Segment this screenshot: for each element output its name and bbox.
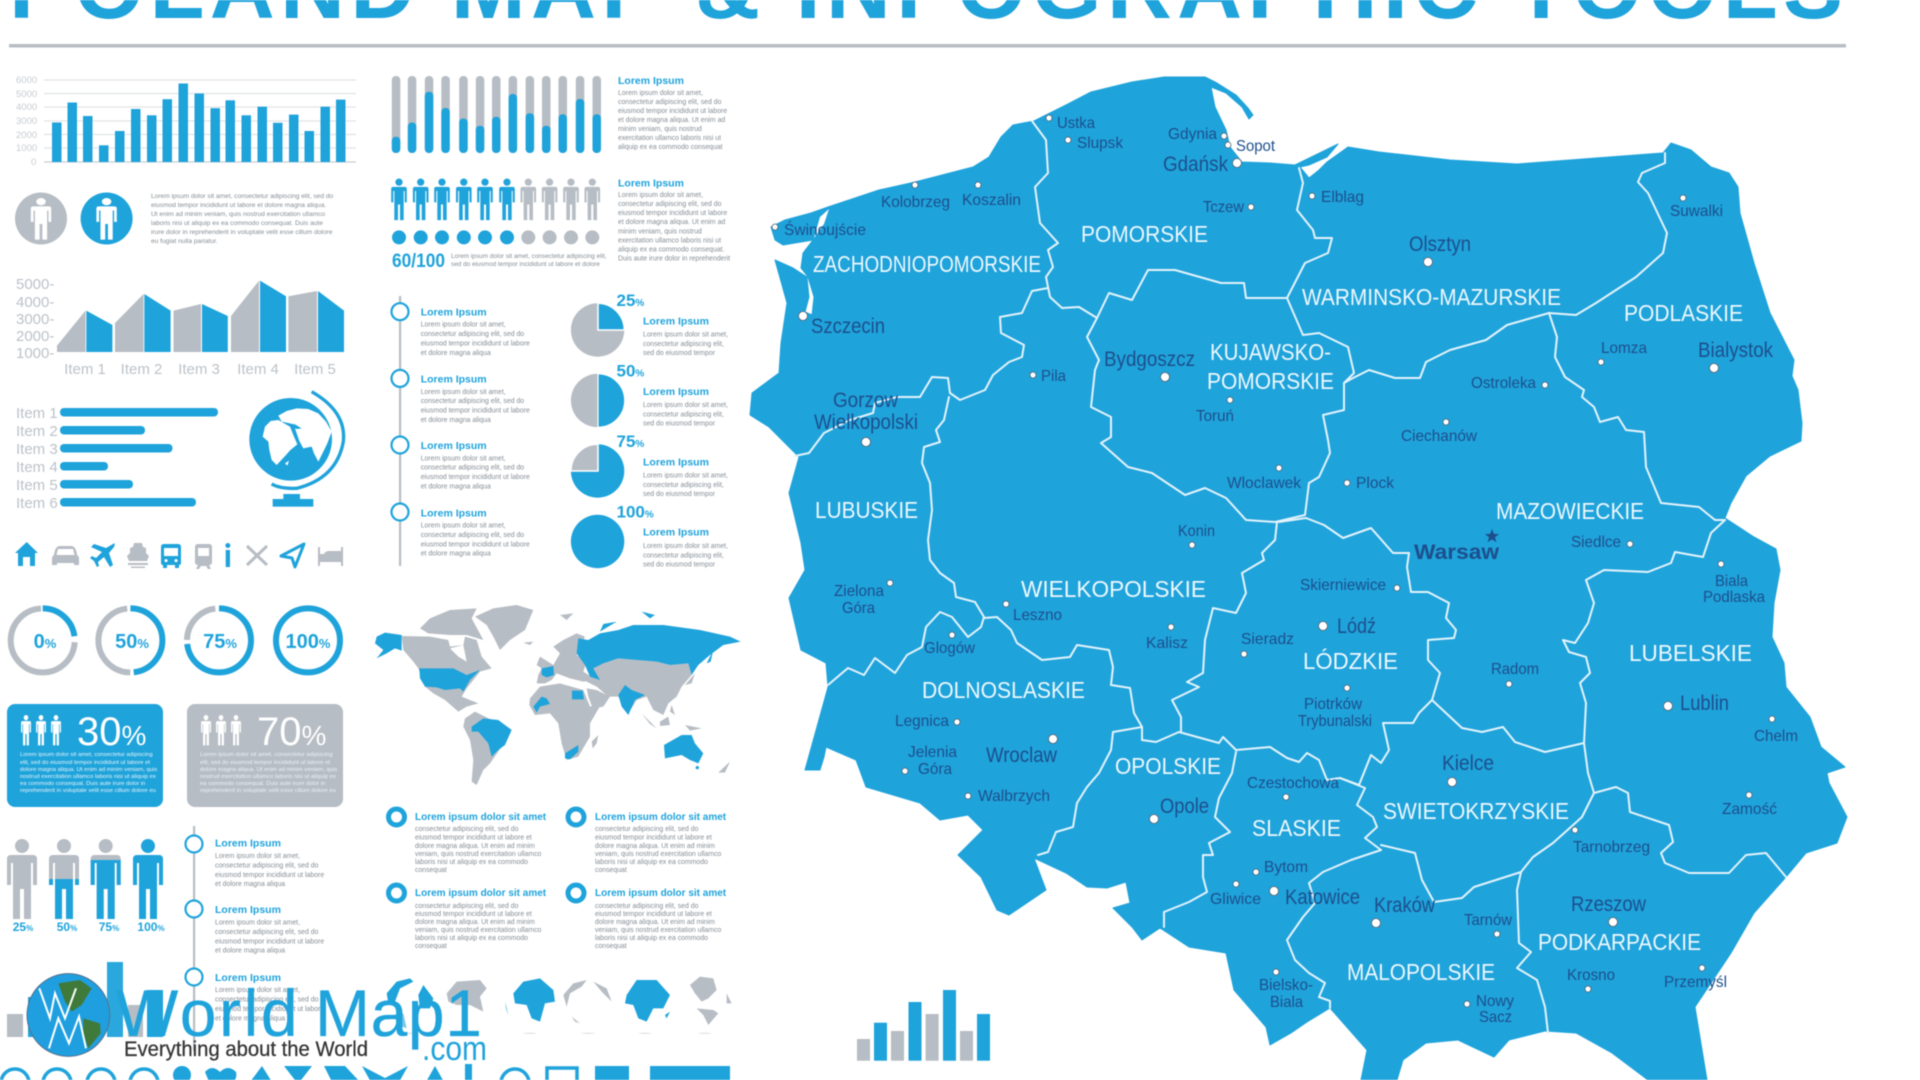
pie: 75 percent: 75%	[616, 432, 644, 451]
city labels: Lódź	[1337, 615, 1376, 638]
city labels: Piotrków	[1304, 696, 1362, 713]
region labels: ZACHODNIOPOMORSKIE	[813, 251, 1041, 277]
region labels: SWIETOKRZYSKIE	[1383, 798, 1569, 824]
city labels: Slupsk	[1077, 135, 1124, 152]
timeline: lower left: consectetur adipiscing elit, sed do	[215, 862, 319, 870]
voivodeship borders	[795, 121, 1786, 1033]
bar chart: lower map bars	[857, 990, 990, 1061]
icon: male and female person discs	[15, 192, 133, 244]
area chart: items one to five: Item 1	[64, 361, 106, 378]
area chart: items one to five: Item 5	[294, 361, 336, 378]
bullet paragraph 2: dolore magna aliqua. Ut enim ad minim	[595, 843, 715, 850]
city labels: Tarnobrzeg	[1573, 839, 1650, 856]
panel: 30 percent blue card: Lorem ipsum dolor sit amet, consectetur adipiscing	[20, 752, 153, 758]
text block: pie captions: Lorem Ipsum	[643, 316, 709, 328]
text block: pie captions: sed do eiusmod tempor	[643, 562, 716, 568]
logo tagline: Everything about the World	[124, 1038, 368, 1061]
icon: logo globe	[27, 974, 110, 1056]
bullet paragraph 2: consequat	[595, 867, 627, 874]
text block: person paragraph: Lorem ipsum dolor sit amet, consectetur adipiscing elit, sed do	[151, 193, 333, 200]
horizontal bar chart: Item 3	[16, 441, 58, 458]
region labels: MALOPOLSKIE	[1347, 959, 1495, 985]
area chart: items one to five: 2000-	[16, 328, 54, 345]
text block: pie captions: consectetur adipiscing elit,	[643, 341, 724, 348]
text block: pictogram caption: consectetur adipiscing elit, sed do	[618, 201, 722, 208]
text block: columns caption: Lorem Ipsum	[618, 75, 684, 87]
city labels: Podlaska	[1703, 589, 1765, 606]
timeline: upper middle: Lorem ipsum dolor sit amet,	[421, 322, 506, 328]
people fill chart: 100%	[137, 920, 165, 934]
region labels: POMORSKIE	[1081, 221, 1208, 247]
city labels: Jelenia	[908, 744, 957, 761]
timeline: upper middle: Lorem ipsum dolor sit amet,	[421, 389, 506, 396]
timeline: lower left: Lorem ipsum dolor sit amet,	[215, 853, 300, 860]
timeline: lower left: Lorem Ipsum	[215, 838, 281, 850]
ring: 50 percent: 50%	[115, 631, 149, 653]
icon: cutlery	[247, 546, 267, 565]
timeline: upper middle: Lorem ipsum dolor sit amet,	[421, 522, 506, 529]
text block: pie captions: sed do eiusmod tempor	[643, 491, 716, 498]
text block: person paragraph: Ut enim ad minim veniam, quis nostrud exercitation ullamco	[151, 211, 325, 218]
timeline: lower left: Lorem ipsum dolor sit amet,	[215, 920, 300, 926]
panel: 70 percent grey card: nostrud exercitation ullamco laboris nisi ut aliquip ex	[200, 774, 336, 780]
area chart: items one to five: 4000-	[16, 294, 54, 311]
pie: 25 percent: 25%	[616, 291, 644, 310]
bullet paragraph 4: veniam, quis nostrud exercitation ullamco	[595, 927, 722, 934]
region labels: OPOLSKIE	[1115, 753, 1221, 779]
pie: 100 percent: 100%	[616, 503, 654, 522]
area chart: items one to five	[16, 276, 344, 378]
timeline: lower left: consectetur adipiscing elit, sed do	[215, 996, 319, 1004]
text block: columns caption: exercitation ullamco laboris nisi ut	[618, 135, 721, 142]
text block: pie captions: Lorem Ipsum	[643, 456, 709, 468]
city labels: Góra	[842, 600, 875, 617]
area chart: items one to five: Item 3	[178, 361, 220, 378]
panel: 70 percent grey card: dolore magna aliqua. Ut enim ad minim veniam, quis	[200, 767, 337, 773]
timeline: upper middle: et dolore magna aliqua	[421, 550, 491, 558]
panel: 30 percent blue card	[7, 704, 163, 807]
bullet paragraph 4	[568, 885, 727, 950]
bullet paragraph 3: consectetur adipiscing elit, sed do	[415, 903, 519, 910]
horizontal bar chart: Item 2	[16, 423, 58, 440]
icon: train	[195, 544, 212, 569]
area chart: items one to five: 5000-	[16, 276, 54, 293]
timeline: upper middle: consectetur adipiscing elit, sed do	[421, 532, 524, 539]
city labels: Wloclawek	[1227, 475, 1302, 492]
pie: 75 percent	[571, 432, 644, 498]
area chart: items one to five: Item 4	[237, 361, 279, 378]
bar chart: column chart with axis	[16, 75, 356, 168]
text block: pictogram caption: exercitation ullamco laboris nisi ut	[618, 238, 721, 244]
bullet paragraph 4: consequat	[595, 943, 627, 950]
timeline: lower left: eiusmod tempor incididunt ut labore	[215, 938, 324, 946]
bullet paragraph 3	[388, 885, 547, 950]
city labels: Lublin	[1680, 692, 1729, 715]
icon: desk globe	[249, 392, 344, 507]
city labels: Góra	[918, 761, 952, 778]
icon: plane	[90, 543, 115, 567]
timeline: lower left	[186, 826, 324, 1051]
text block: columns caption: Lorem ipsum dolor sit amet,	[618, 90, 703, 97]
horizontal bar chart: Item 4	[16, 459, 58, 476]
city labels: Gliwice	[1210, 891, 1261, 908]
timeline: lower left: Lorem Ipsum	[215, 904, 281, 916]
people fill chart: 75%	[99, 920, 119, 934]
timeline: upper middle: et dolore magna aliqua	[421, 484, 491, 490]
text block: pie captions: Lorem ipsum dolor sit amet,	[643, 332, 728, 338]
text block: pie captions: consectetur adipiscing elit,	[643, 482, 724, 489]
bullet paragraph 3: laboris nisi ut aliquip ex ea commodo	[415, 935, 528, 942]
city labels: Sopot	[1236, 138, 1276, 155]
city labels: Kielce	[1442, 752, 1494, 775]
bullet paragraph 2	[568, 809, 727, 874]
text block: pie captions: consectetur adipiscing elit,	[643, 411, 724, 418]
panel: 70 percent grey card: 70%	[257, 710, 326, 754]
city labels: Warsaw	[1414, 541, 1500, 564]
bar chart: column chart with axis: 0	[31, 157, 36, 168]
text block: pictogram caption: eiusmod tempor incididunt ut labore	[618, 210, 727, 217]
region labels: LUBUSKIE	[815, 497, 918, 523]
region labels: KUJAWSKO-	[1210, 339, 1331, 365]
icon row: small globes	[387, 977, 732, 1034]
text block: columns caption: aliquip ex ea commodo consequat	[618, 144, 723, 151]
bullet paragraph 3: consequat	[415, 943, 447, 950]
icon: car	[52, 546, 79, 565]
icon row: bottom clipped shapes	[1, 1064, 730, 1080]
timeline: lower left: consectetur adipiscing elit, sed do	[215, 929, 319, 936]
bullet paragraph 4: Lorem ipsum dolor sit amet	[595, 888, 727, 899]
city labels: Ustka	[1057, 115, 1095, 132]
city labels: Bielsko-	[1259, 977, 1313, 994]
city labels: Tczew	[1203, 199, 1244, 216]
city labels: Toruń	[1196, 408, 1234, 425]
region labels: POMORSKIE	[1207, 368, 1334, 394]
icon: home	[15, 542, 38, 566]
icon: bus	[161, 544, 181, 568]
bar chart: column chart with axis: 5000	[16, 89, 37, 100]
region labels: LUBELSKIE	[1629, 640, 1752, 666]
city labels: Pila	[1041, 368, 1066, 385]
text block: pictogram caption	[618, 178, 730, 262]
city labels: Gdynia	[1168, 126, 1217, 143]
bullet paragraph 1: Lorem ipsum dolor sit amet	[415, 812, 547, 823]
icon: info	[225, 543, 230, 567]
area chart: items one to five: 1000-	[16, 345, 54, 362]
pie: 50 percent	[571, 362, 644, 427]
pictogram: 60 of 100 people: Lorem ipsum dolor sit amet, consectetur adipiscing elit,	[451, 253, 607, 260]
logo: WorldMap1	[27, 974, 487, 1068]
city labels: Rzeszow	[1571, 893, 1647, 916]
region labels: DOLNOSLASKIE	[922, 677, 1085, 703]
horizontal bar chart: Item 1	[16, 405, 58, 422]
bullet paragraph 3: veniam, quis nostrud exercitation ullamco	[415, 927, 542, 934]
text block: person paragraph: irure dolor in reprehenderit in voluptate velit esse cillum dolore	[151, 229, 333, 236]
city labels: Sieradz	[1241, 631, 1294, 648]
bar chart: column chart with axis: 4000	[16, 102, 37, 113]
ring: 75 percent	[187, 608, 251, 672]
city labels: Szczecin	[811, 315, 885, 338]
people fill chart: 50%	[57, 920, 77, 934]
text block: pictogram caption: et dolore magna aliqua. Ut enim ad	[618, 219, 725, 226]
city labels: Wroclaw	[986, 744, 1058, 767]
city labels: Skierniewice	[1300, 577, 1386, 594]
timeline: upper middle: eiusmod tempor incididunt ut labore	[421, 408, 530, 415]
panel: 30 percent blue card: nostrud exercitation ullamco laboris nisi ut aliquip ex	[20, 774, 156, 780]
text block: columns caption: minim veniam, quis nostrud	[618, 126, 702, 133]
icon row: travel icons	[15, 542, 343, 569]
city labels: Biala	[1270, 994, 1303, 1011]
city labels: Plock	[1356, 475, 1395, 492]
text block: pictogram caption: aliquip ex ea commodo consequat.	[618, 246, 725, 254]
timeline: upper middle: eiusmod tempor incididunt ut labore	[421, 474, 530, 481]
panel: 70 percent grey card: ea commodo consequat. Duis aute irure dolor in	[200, 781, 325, 787]
timeline: lower left: et dolore magna aliqua	[215, 948, 285, 954]
bullet paragraph 1: dolore magna aliqua. Ut enim ad minim	[415, 843, 535, 850]
timeline: upper middle: eiusmod tempor incididunt ut labore	[421, 340, 530, 347]
bullet paragraph 4: eiusmod tempor incididunt ut labore et	[595, 911, 712, 918]
bullet paragraph 2: laboris nisi ut aliquip ex ea commodo	[595, 859, 708, 866]
bullet paragraph 3: Lorem ipsum dolor sit amet	[415, 888, 547, 899]
region labels: LÓDZKIE	[1303, 648, 1398, 674]
city labels: Sacz	[1479, 1009, 1512, 1026]
city labels: Glogów	[924, 640, 975, 657]
city labels: Krosno	[1567, 967, 1615, 984]
text block: columns caption: consectetur adipiscing elit, sed do	[618, 99, 722, 106]
bullet paragraph 1	[388, 809, 547, 874]
text block: columns caption: et dolore magna aliqua. Ut enim ad	[618, 117, 725, 124]
logo wordmark: World	[116, 976, 300, 1050]
city labels: Lomza	[1601, 340, 1647, 357]
timeline: upper middle: et dolore magna aliqua	[421, 350, 491, 357]
horizontal bar chart: Item 5	[16, 477, 58, 494]
bullet paragraph 1: laboris nisi ut aliquip ex ea commodo	[415, 859, 528, 866]
pie: 25 percent	[571, 291, 644, 357]
text block: columns caption	[618, 75, 727, 151]
panel: 70 percent grey card: reprehenderit in voluptate velit esse cillum dolore eu	[200, 788, 336, 794]
timeline: upper middle	[392, 296, 530, 566]
panel: 30 percent blue card: 30%	[77, 710, 146, 754]
city labels: Koszalin	[962, 192, 1021, 209]
text block: pie captions: Lorem ipsum dolor sit amet,	[643, 543, 728, 550]
icon: bed	[318, 547, 343, 566]
text block: four bullet paragraphs	[388, 809, 727, 950]
city labels: Walbrzych	[978, 788, 1050, 805]
city labels: Kalisz	[1146, 635, 1188, 652]
pictogram: 60 of 100 people: 60/100	[392, 251, 445, 272]
timeline: upper middle: Lorem ipsum dolor sit amet,	[421, 455, 506, 462]
city labels: Radom	[1491, 661, 1539, 678]
city labels: Opole	[1160, 795, 1209, 818]
region labels: WARMINSKO-MAZURSKIE	[1302, 284, 1561, 310]
panel: 70 percent grey card: Lorem ipsum dolor sit amet, consectetur adipiscing	[200, 752, 333, 758]
text block: pictogram caption: Lorem ipsum dolor sit amet,	[618, 192, 703, 199]
text block: person paragraph: eu fugiat nulla pariatur.	[151, 238, 218, 245]
bar chart: small bars behind logo	[7, 962, 163, 1037]
pie: 100 percent	[571, 503, 654, 568]
bullet paragraph 1: eiusmod tempor incididunt ut labore et	[415, 835, 532, 842]
timeline: upper middle: Lorem Ipsum	[421, 440, 487, 452]
city labels: Siedlce	[1571, 534, 1621, 551]
city labels: Zielona	[834, 583, 884, 600]
region labels: PODKARPACKIE	[1538, 929, 1701, 955]
logo wordmark: Map1	[315, 976, 482, 1050]
city labels: Chelm	[1754, 728, 1798, 745]
bullet paragraph 3: dolore magna aliqua. Ut enim ad minim	[415, 919, 535, 926]
city labels: Gorzow	[833, 389, 899, 412]
city labels: Czestochowa	[1247, 775, 1339, 792]
timeline: lower left: et dolore magna aliqua	[215, 1016, 285, 1022]
region labels: SLASKIE	[1252, 815, 1341, 841]
ring: 100 percent: 100%	[286, 631, 331, 653]
region labels: WIELKOPOLSKIE	[1021, 576, 1206, 602]
icon: ship	[127, 543, 149, 568]
ring: 100 percent	[276, 608, 340, 672]
city labels: Elblag	[1321, 189, 1364, 206]
pictogram: 60 of 100 people	[391, 178, 607, 272]
city labels: Ostroleka	[1471, 375, 1536, 392]
city labels: Kraków	[1374, 894, 1436, 917]
bar chart: column chart with axis: 2000	[16, 130, 37, 141]
text block: pictogram caption: minim veniam, quis nostrud	[618, 228, 702, 236]
city labels: Suwalki	[1670, 203, 1723, 220]
bullet paragraph 1: consectetur adipiscing elit, sed do	[415, 826, 519, 833]
city labels: Biala	[1715, 573, 1748, 590]
bar chart: column chart with axis: 3000	[16, 116, 37, 127]
pictogram: 60 of 100 people: sed do eiusmod tempor incididunt ut labore et dolore	[451, 261, 600, 268]
timeline: lower left: eiusmod tempor incididunt ut labore	[215, 1006, 324, 1013]
text block: columns caption: eiusmod tempor incididunt ut labore	[618, 108, 727, 115]
bullet paragraph 4: consectetur adipiscing elit, sed do	[595, 903, 699, 910]
ring: 75 percent: 75%	[203, 631, 237, 653]
panel: 70 percent grey card	[187, 704, 343, 807]
timeline: lower left: et dolore magna aliqua	[215, 881, 285, 888]
map: Poland voivodeships	[750, 77, 1847, 1080]
timeline: upper middle: consectetur adipiscing elit, sed do	[421, 331, 524, 338]
city labels: Gdańsk	[1163, 153, 1228, 176]
city labels: Leszno	[1013, 607, 1062, 624]
bullet paragraph 2: consectetur adipiscing elit, sed do	[595, 826, 699, 833]
text block: pictogram caption: Lorem Ipsum	[618, 178, 684, 190]
area chart: items one to five: 3000-	[16, 311, 54, 328]
map outline	[750, 77, 1847, 1080]
city labels: Olsztyn	[1409, 233, 1471, 256]
timeline: upper middle: consectetur adipiscing elit, sed do	[421, 465, 524, 472]
city labels: Bytom	[1264, 859, 1308, 876]
timeline: upper middle: consectetur adipiscing elit, sed do	[421, 398, 524, 405]
bullet paragraph 4: laboris nisi ut aliquip ex ea commodo	[595, 935, 708, 942]
city labels: Bydgoszcz	[1104, 348, 1195, 371]
lagoon notch	[814, 209, 829, 238]
city labels: Bialystok	[1698, 339, 1773, 362]
text block: person paragraph: eiusmod tempor incididunt ut labore et dolore magna aliqua.	[151, 202, 326, 209]
text block: pie captions: Lorem ipsum dolor sit amet,	[643, 402, 728, 409]
bullet paragraph 2: Lorem ipsum dolor sit amet	[595, 812, 727, 823]
text block: pie captions: sed do eiusmod tempor	[643, 350, 716, 357]
ring: 0 percent	[11, 608, 75, 672]
panel: 30 percent blue card: ea commodo consequat. Duis aute irure dolor in	[20, 781, 145, 787]
timeline: lower left: Lorem Ipsum	[215, 972, 281, 984]
text block: pie captions	[643, 316, 728, 568]
horizontal bar chart	[16, 405, 218, 512]
people fill chart: 25%	[13, 920, 33, 934]
timeline: upper middle: Lorem Ipsum	[421, 306, 487, 318]
progress rings	[11, 608, 340, 672]
text block: pie captions: Lorem Ipsum	[643, 386, 709, 398]
city labels: Katowice	[1285, 886, 1360, 909]
pie charts: 25 to 100 percent	[571, 291, 654, 568]
city labels: Tarnów	[1464, 912, 1512, 929]
city labels: Zamość	[1722, 801, 1777, 818]
text block: pie captions: Lorem Ipsum	[643, 526, 709, 538]
timeline: upper middle: Lorem Ipsum	[421, 508, 487, 520]
region labels: PODLASKIE	[1624, 300, 1743, 326]
bullet paragraph 1: consequat	[415, 867, 447, 874]
bar chart: rounded progress columns	[392, 76, 601, 153]
area chart: items one to five: Item 2	[121, 361, 162, 378]
city labels	[784, 115, 1798, 1026]
ring: 0 percent: 0%	[34, 631, 57, 653]
world map	[375, 605, 741, 785]
region labels	[813, 221, 1752, 985]
bullet paragraph 2: eiusmod tempor incididunt ut labore et	[595, 835, 712, 842]
bullet paragraph 2: veniam, quis nostrud exercitation ullamco	[595, 851, 722, 858]
city labels: Legnica	[895, 713, 949, 730]
logo suffix: .com	[422, 1030, 487, 1068]
pie: 50 percent: 50%	[616, 362, 644, 381]
panel: 70 percent grey card: elit, sed do eiusmod tempor incididunt ut labore et	[200, 760, 330, 766]
text block: person paragraph	[151, 193, 333, 245]
icon: paper plane	[281, 544, 304, 567]
city labels: Trybunalski	[1298, 713, 1372, 730]
ring: 50 percent	[98, 608, 162, 672]
timeline: lower left: Lorem ipsum dolor sit amet,	[215, 987, 300, 994]
horizontal bar chart: Item 6	[16, 495, 58, 512]
city labels: Kolobrzeg	[881, 194, 950, 211]
text block: pie captions: sed do eiusmod tempor	[643, 420, 716, 428]
title rule	[9, 44, 1846, 48]
timeline: upper middle: et dolore magna aliqua	[421, 417, 491, 424]
text block: pie captions: Lorem ipsum dolor sit amet,	[643, 472, 728, 480]
city labels: Nowy	[1476, 993, 1514, 1010]
bar chart: column chart with axis: 1000	[16, 143, 37, 154]
panel: 30 percent blue card: elit, sed do eiusmod tempor incididunt ut labore et	[20, 760, 150, 766]
bar chart: column chart with axis: 6000	[16, 75, 37, 86]
icon: capital star	[1485, 529, 1499, 542]
city labels: Świnoujście	[784, 220, 866, 239]
bullet paragraph 1: veniam, quis nostrud exercitation ullamco	[415, 851, 542, 858]
text block: pie captions: consectetur adipiscing elit,	[643, 552, 724, 559]
region labels: MAZOWIECKIE	[1496, 498, 1644, 524]
panel: 30 percent blue card: dolore magna aliqua. Ut enim ad minim veniam, quis	[20, 767, 157, 773]
city labels: Przemyśl	[1664, 974, 1727, 991]
city labels: Ciechanów	[1401, 428, 1477, 445]
panel: 30 percent blue card: reprehenderit in voluptate velit esse cillum dolore eu	[20, 788, 156, 794]
text block: pictogram caption: Duis aute irure dolor in reprehenderit	[618, 256, 730, 262]
city labels: Konin	[1178, 523, 1215, 540]
city dots	[772, 115, 1775, 1007]
timeline: lower left: eiusmod tempor incididunt ut labore	[215, 872, 324, 879]
text block: person paragraph: laboris nisi ut aliquip ex ea commodo consequat. Duis aute	[151, 220, 323, 227]
bullet paragraph 3: eiusmod tempor incididunt ut labore et	[415, 911, 532, 918]
timeline: upper middle: eiusmod tempor incididunt ut labore	[421, 541, 530, 548]
timeline: upper middle: Lorem Ipsum	[421, 374, 487, 386]
people fill chart	[7, 839, 165, 934]
bullet paragraph 4: dolore magna aliqua. Ut enim ad minim	[595, 919, 715, 926]
city labels: Wielkopolski	[814, 411, 918, 434]
